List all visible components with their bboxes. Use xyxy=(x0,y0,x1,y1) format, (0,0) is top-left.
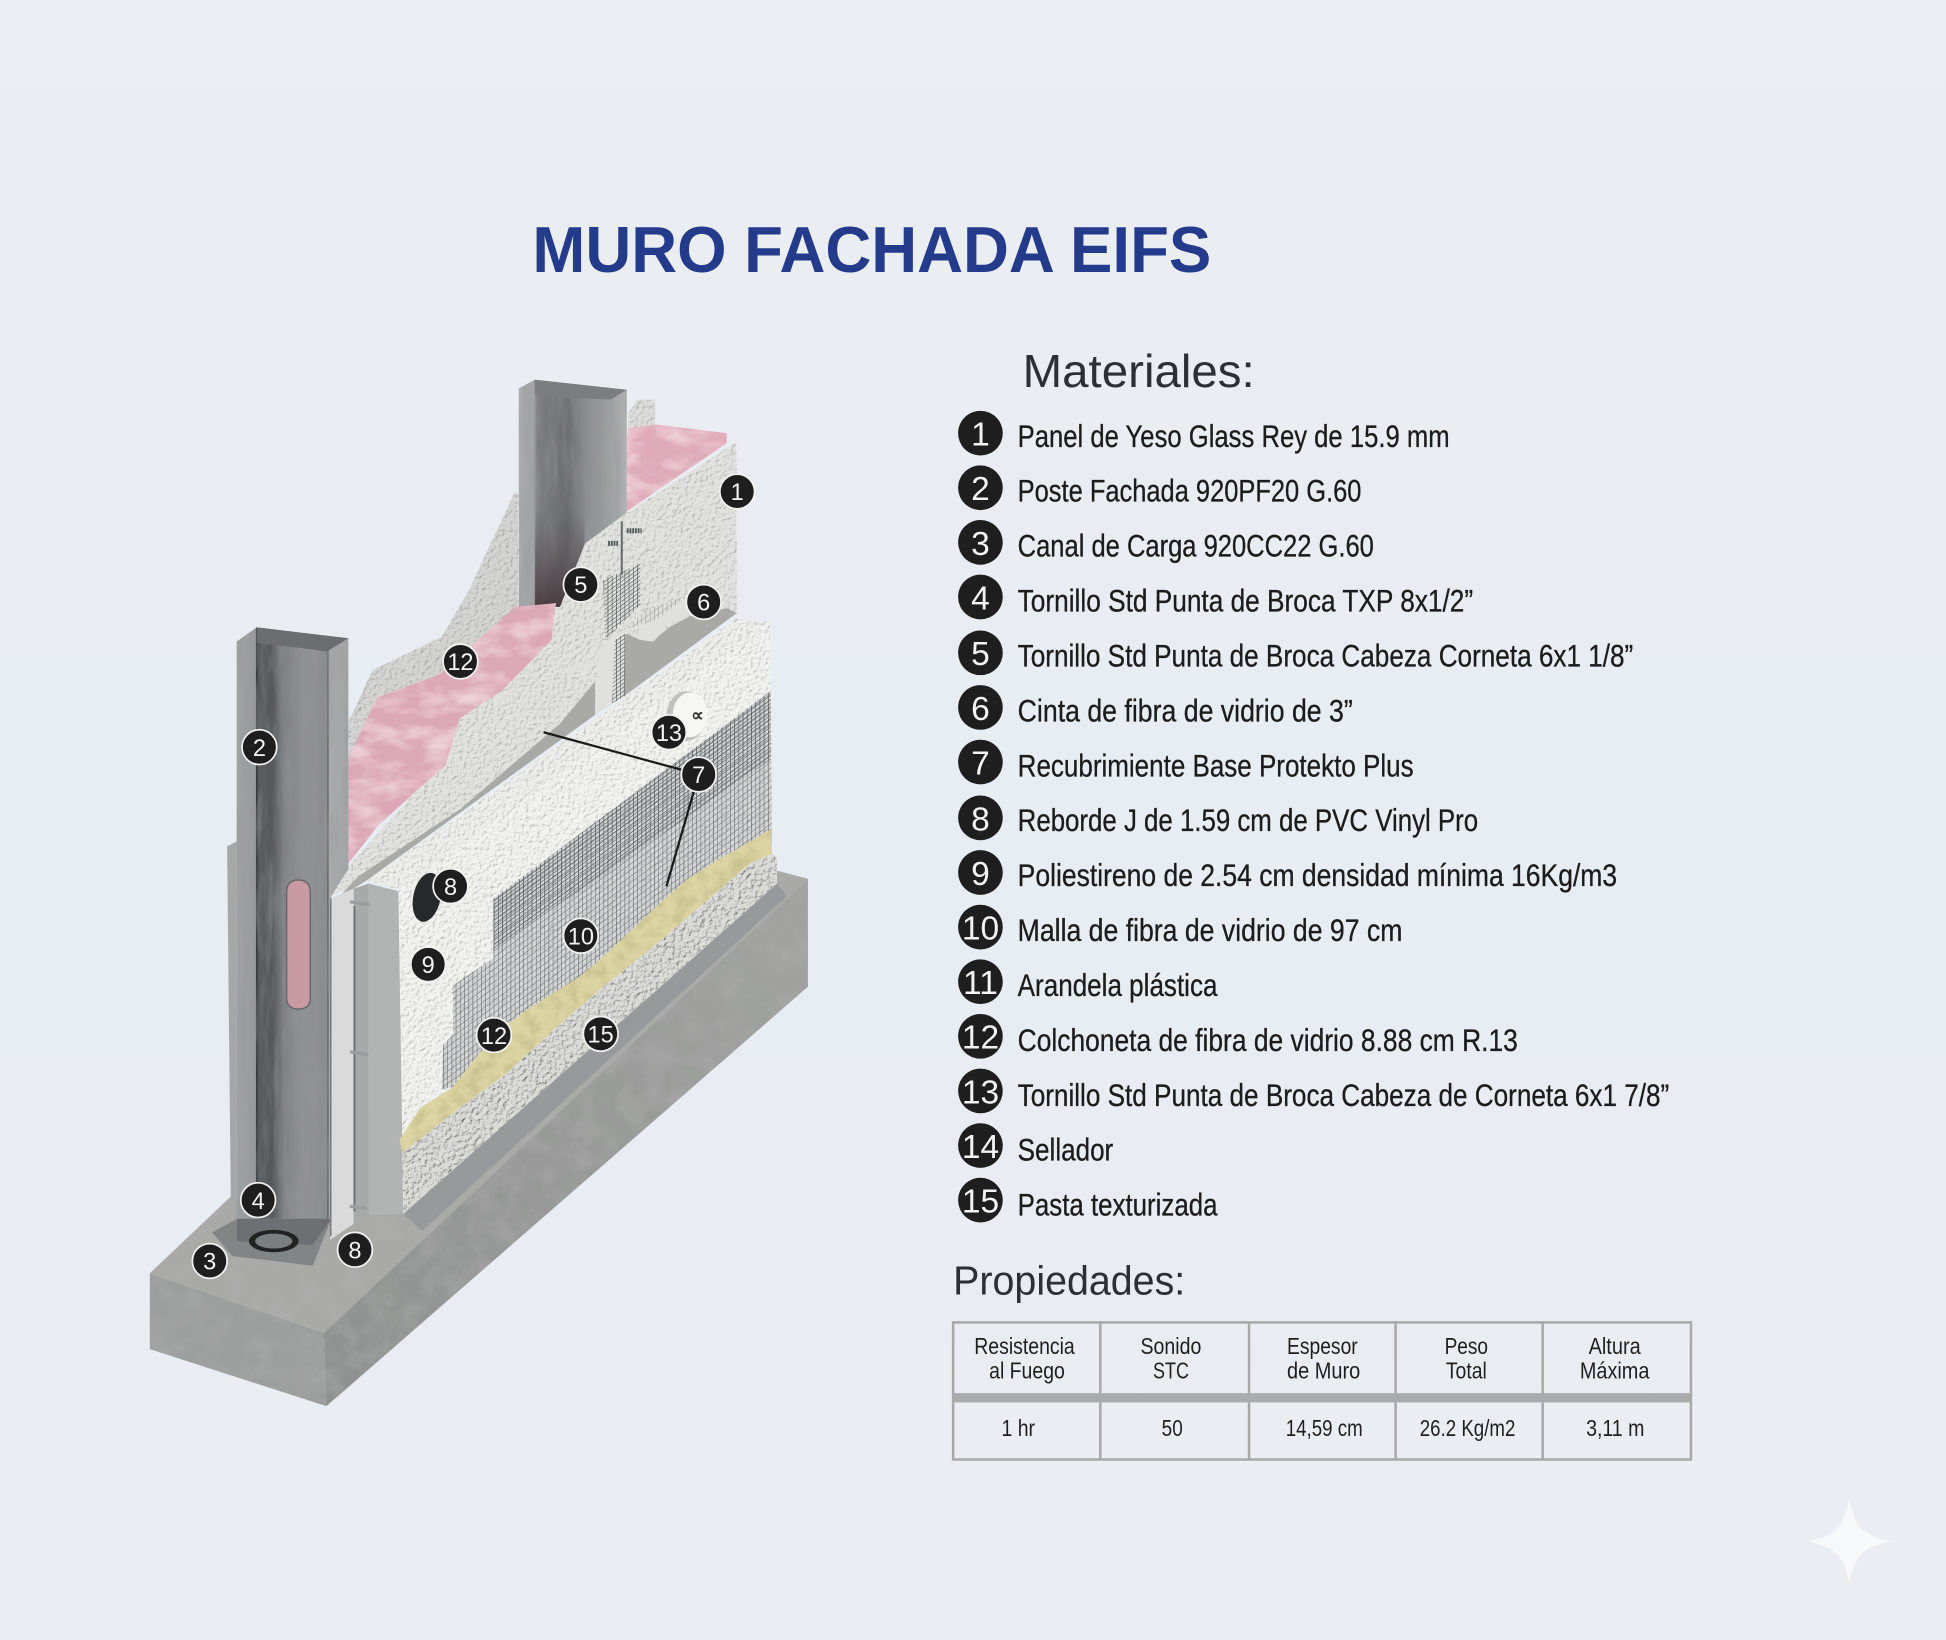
callout 8 upper xyxy=(433,869,468,904)
polystyrene foam face xyxy=(399,622,772,1148)
column: peso total: Total xyxy=(1446,1357,1487,1383)
callout 2: 2 xyxy=(253,735,266,761)
fiberglass insulation upper xyxy=(627,423,727,511)
item 13: 13 xyxy=(962,1074,999,1111)
item 11 xyxy=(958,959,1218,1004)
column: espesor de muro: de Muro xyxy=(1287,1357,1360,1383)
table grid xyxy=(953,1322,1691,1460)
column: resistencia al fuego: al Fuego xyxy=(989,1357,1065,1383)
rear steel stud xyxy=(519,380,627,607)
item 9: 9 xyxy=(971,856,990,893)
item 15: 15 xyxy=(962,1184,999,1221)
column: espesor de muro: 14,59 cm xyxy=(1286,1415,1363,1441)
callout 1: 1 xyxy=(731,479,744,505)
callout 5 xyxy=(563,567,598,602)
callout 15: 15 xyxy=(588,1022,614,1048)
base coat band xyxy=(338,681,595,899)
item 11: Arandela plástica xyxy=(1018,968,1218,1003)
item 4: 4 xyxy=(971,580,990,617)
item 8 xyxy=(958,796,1478,840)
item 2: Poste Fachada 920PF20 G.60 xyxy=(1018,474,1361,509)
column: altura maxima: 3,11 m xyxy=(1586,1415,1644,1441)
callout 12: 12 xyxy=(447,649,474,675)
plastic washer white xyxy=(666,691,707,741)
item 6: Cinta de fibra de vidrio de 3” xyxy=(1018,693,1353,728)
item 7: Recubrimiente Base Protekto Plus xyxy=(1018,748,1414,783)
item 6: 6 xyxy=(971,691,990,728)
fiberglass insulation lower xyxy=(348,603,556,864)
callout 3: 3 xyxy=(203,1249,216,1275)
leader lines 7 xyxy=(544,732,699,886)
item 7: 7 xyxy=(971,745,990,782)
callout 8 lower: 8 xyxy=(348,1237,362,1263)
column: sonido stc: Sonido xyxy=(1141,1333,1201,1359)
item 5: Tornillo Std Punta de Broca Cabeza Corneta 6x1 1/8” xyxy=(1018,638,1633,673)
stud opening xyxy=(287,880,310,1009)
callout 13: 13 xyxy=(656,720,682,746)
properties table xyxy=(953,1322,1691,1460)
heading: materiales: Materiales: xyxy=(1023,345,1255,397)
materials list xyxy=(958,411,1669,1223)
wall section illustration xyxy=(150,380,808,1406)
callout 6: 6 xyxy=(697,590,710,616)
column: peso total: Peso xyxy=(1445,1333,1488,1359)
item 15: Pasta texturizada xyxy=(1018,1188,1218,1223)
column: espesor de muro xyxy=(1286,1333,1363,1441)
item 1 xyxy=(958,411,1450,455)
item 14: Sellador xyxy=(1018,1133,1113,1168)
callout 12 lower: 12 xyxy=(481,1023,507,1049)
column: peso total xyxy=(1420,1333,1515,1441)
callout 9: 9 xyxy=(422,952,435,978)
callout 4 xyxy=(241,1183,276,1218)
callout 1 xyxy=(720,474,755,509)
column: sonido stc: STC xyxy=(1153,1357,1189,1383)
callout 12 lower xyxy=(477,1018,511,1052)
callout 9 xyxy=(411,947,446,982)
item 9: Poliestireno de 2.54 cm densidad mínima 16Kg/m3 xyxy=(1018,858,1617,893)
item 8: Reborde J de 1.59 cm de PVC Vinyl Pro xyxy=(1018,803,1478,838)
recess behind tape xyxy=(623,608,737,697)
callout 15 xyxy=(583,1016,618,1051)
item 6 xyxy=(958,685,1353,730)
panel top edge xyxy=(628,400,655,428)
foam end face xyxy=(369,884,403,1215)
screw 5 xyxy=(608,521,642,575)
item 3: 3 xyxy=(971,526,990,563)
item 12: 12 xyxy=(962,1020,999,1057)
item 14 xyxy=(958,1123,1113,1168)
item 8: 8 xyxy=(971,801,990,838)
item 9 xyxy=(958,850,1617,895)
item 4 xyxy=(958,575,1473,619)
item 10: Malla de fibra de vidrio de 97 cm xyxy=(1018,913,1402,948)
item 3 xyxy=(958,520,1374,565)
item 5: 5 xyxy=(971,636,990,673)
item 1: Panel de Yeso Glass Rey de 15.9 mm xyxy=(1018,419,1450,454)
foam top edge xyxy=(368,618,770,890)
callout 13 xyxy=(652,715,686,750)
column: sonido stc: 50 xyxy=(1162,1415,1183,1441)
plastic washer white: ∝ xyxy=(691,705,704,725)
rear gypsum panel xyxy=(349,491,519,758)
steel stud xyxy=(227,627,348,1219)
item 5 xyxy=(958,630,1633,675)
column: resistencia al fuego: 1 hr xyxy=(1002,1415,1035,1441)
callout 8 lower xyxy=(338,1232,372,1267)
item 12: Colchoneta de fibra de vidrio 8.88 cm R.13 xyxy=(1018,1023,1518,1058)
callout 4: 4 xyxy=(252,1188,265,1214)
column: resistencia al fuego: Resistencia xyxy=(974,1333,1075,1359)
column: resistencia al fuego xyxy=(974,1333,1075,1441)
concrete base xyxy=(150,869,808,1406)
callout 6 xyxy=(686,585,721,619)
item 10: 10 xyxy=(962,911,999,948)
item 13 xyxy=(958,1069,1669,1113)
exterior gypsum panel xyxy=(331,442,737,896)
title: MURO FACHADA EIFS xyxy=(532,214,1211,286)
callout 7: 7 xyxy=(692,762,705,788)
column: espesor de muro: Espesor xyxy=(1287,1333,1358,1359)
item 1: 1 xyxy=(971,417,990,454)
sealant xyxy=(400,829,772,1153)
bottom track xyxy=(212,1219,331,1266)
J bead xyxy=(330,884,370,1240)
heading: propiedades: Propiedades: xyxy=(953,1257,1185,1303)
column: altura maxima: Altura xyxy=(1589,1333,1641,1359)
item 12 xyxy=(958,1014,1518,1059)
texture paste xyxy=(402,854,777,1214)
callout 3 xyxy=(192,1244,227,1278)
header separator band xyxy=(953,1393,1691,1402)
column: altura maxima xyxy=(1580,1333,1650,1441)
column: altura maxima: Máxima xyxy=(1580,1357,1650,1383)
item 15 xyxy=(958,1178,1218,1223)
callout 2 xyxy=(242,730,277,765)
item 2: 2 xyxy=(971,471,990,508)
callout 10 xyxy=(563,918,598,953)
item 14: 14 xyxy=(962,1129,999,1166)
callout 12 xyxy=(443,644,478,679)
item 11: 11 xyxy=(963,965,998,1002)
column: sonido stc xyxy=(1141,1333,1201,1441)
item 7 xyxy=(958,740,1414,784)
item 4: Tornillo Std Punta de Broca TXP 8x1/2” xyxy=(1018,584,1473,619)
callout 10: 10 xyxy=(568,923,594,949)
item 10 xyxy=(958,905,1402,949)
item 2 xyxy=(958,465,1361,510)
item 13: Tornillo Std Punta de Broca Cabeza de Corneta 6x1 7/8” xyxy=(1018,1078,1669,1113)
plastic washer black xyxy=(408,870,445,924)
callout 7 xyxy=(681,757,716,792)
column: peso total: 26.2 Kg/m2 xyxy=(1420,1415,1515,1441)
icon: sparkle watermark xyxy=(1807,1499,1891,1584)
fiberglass mesh xyxy=(442,691,772,1090)
callout 5: 5 xyxy=(574,572,587,598)
item 3: Canal de Carga 920CC22 G.60 xyxy=(1018,529,1374,564)
callout 8 upper: 8 xyxy=(444,874,457,900)
glass fibre tape xyxy=(595,563,688,715)
